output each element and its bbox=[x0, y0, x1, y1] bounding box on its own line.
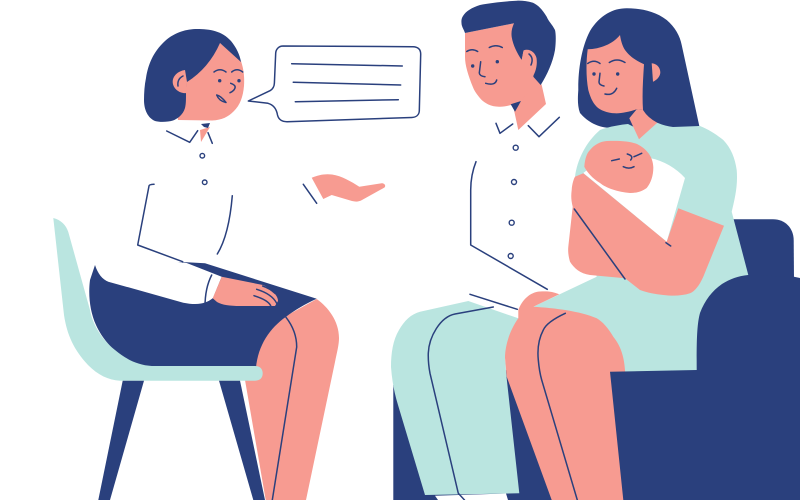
father neck shadow bbox=[511, 101, 521, 112]
doctor collar bbox=[167, 131, 212, 143]
speech bubble bbox=[248, 46, 421, 122]
mother neck bbox=[629, 109, 657, 139]
father hair bbox=[461, 1, 556, 85]
doctor facial features bbox=[214, 70, 243, 102]
father leg bbox=[391, 301, 519, 500]
doctor face bbox=[172, 43, 244, 120]
doctor shirt buttons bbox=[200, 153, 207, 185]
father shirt outline bbox=[470, 162, 547, 309]
doctor figure bbox=[53, 29, 385, 500]
mother arm cradling baby bbox=[568, 173, 724, 296]
mother figure bbox=[505, 8, 750, 500]
father face bbox=[465, 23, 538, 107]
doctor neck bbox=[200, 123, 210, 142]
father shirt buttons bbox=[508, 145, 518, 258]
father ear bbox=[522, 50, 537, 76]
father neck bbox=[514, 70, 546, 130]
doctor skirt bbox=[89, 262, 317, 368]
father collar bbox=[496, 117, 559, 137]
mother leg bbox=[505, 291, 630, 500]
doctor shirt outline bbox=[138, 184, 232, 262]
doctor gesturing hand bbox=[303, 174, 385, 203]
mother hair bbox=[578, 8, 699, 135]
doctor leg bbox=[245, 299, 339, 500]
sofa back bbox=[733, 219, 794, 300]
mother ear bbox=[652, 63, 660, 82]
mother dress bbox=[533, 123, 750, 375]
mother facial features bbox=[588, 60, 625, 94]
doctor sleeve bbox=[95, 258, 222, 304]
chair seat and back bbox=[53, 218, 263, 381]
navy behind father's legs bbox=[393, 370, 565, 500]
doctor hand on lap bbox=[205, 275, 278, 307]
chair legs bbox=[98, 381, 265, 500]
sofa seat and arm bbox=[610, 275, 800, 500]
doctor hair bbox=[144, 29, 241, 122]
father figure bbox=[391, 1, 559, 500]
mother face bbox=[586, 35, 644, 113]
doctor ear bbox=[173, 70, 187, 93]
baby head bbox=[584, 141, 653, 193]
father facial features bbox=[467, 46, 502, 84]
baby blanket bbox=[583, 158, 685, 242]
